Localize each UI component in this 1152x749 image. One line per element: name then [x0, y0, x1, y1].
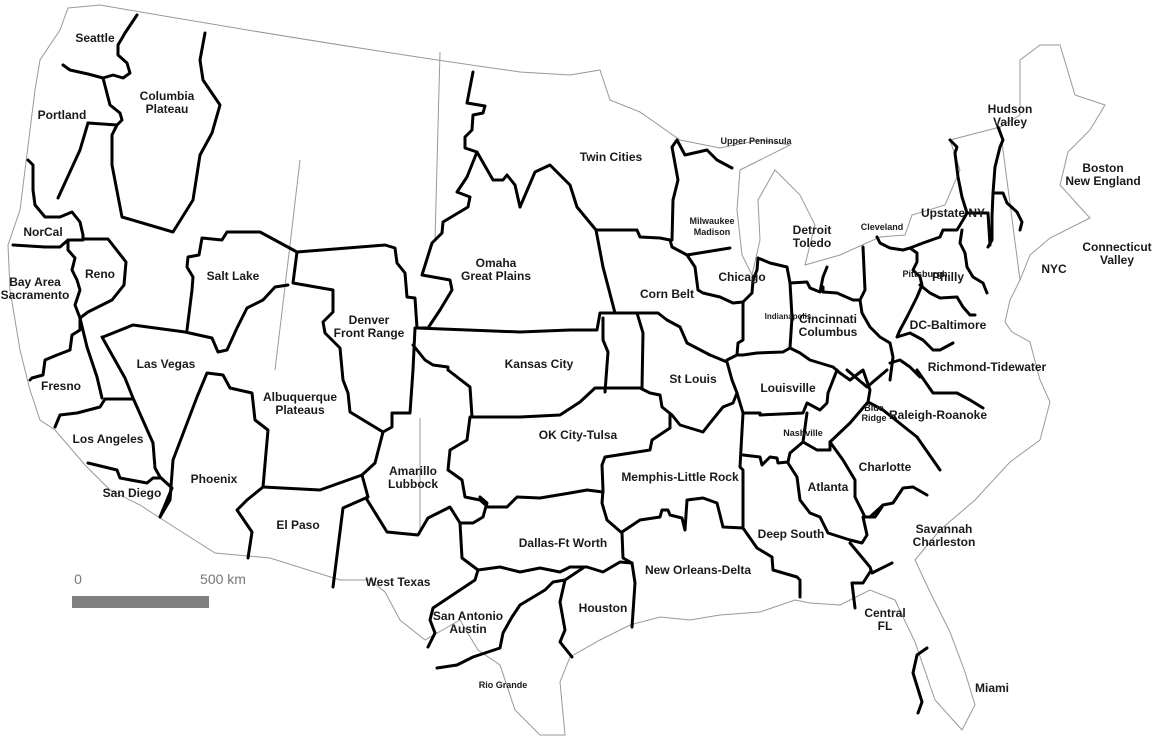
- labels: Plateau: [146, 102, 188, 116]
- labels: Los Angeles: [73, 432, 144, 446]
- labels: Hudson: [988, 102, 1032, 116]
- labels: Great Plains: [461, 269, 531, 283]
- labels: Valley: [1100, 253, 1134, 267]
- labels: Twin Cities: [580, 150, 643, 164]
- labels: Charleston: [913, 535, 975, 549]
- labels: New Orleans-Delta: [645, 563, 751, 577]
- labels: Cleveland: [861, 222, 903, 232]
- labels: West Texas: [366, 575, 431, 589]
- labels: Charlotte: [859, 460, 912, 474]
- labels: St Louis: [669, 372, 717, 386]
- labels: Savannah: [916, 522, 972, 536]
- labels: Kansas City: [505, 357, 574, 371]
- labels: Toledo: [793, 236, 831, 250]
- labels: Richmond-Tidewater: [928, 360, 1047, 374]
- labels: Denver: [349, 313, 390, 327]
- labels: Bay Area: [9, 275, 61, 289]
- labels: Dallas-Ft Worth: [519, 536, 607, 550]
- labels: DC-Baltimore: [910, 318, 987, 332]
- labels: Boston: [1082, 161, 1124, 175]
- labels: Reno: [85, 267, 115, 281]
- labels: NYC: [1041, 262, 1067, 276]
- labels: Indianapolis: [765, 312, 812, 321]
- labels: Pittsburgh: [902, 269, 948, 279]
- labels: Austin: [449, 622, 487, 636]
- labels: Upper Peninsula: [720, 136, 793, 146]
- labels: Columbus: [799, 325, 858, 339]
- labels: Columbia: [140, 89, 195, 103]
- labels: Central: [864, 606, 906, 620]
- labels: Chicago: [718, 270, 766, 284]
- labels: Philly: [932, 270, 964, 284]
- labels: Corn Belt: [640, 287, 694, 301]
- labels: Connecticut: [1082, 240, 1152, 254]
- labels: Rio Grande: [479, 680, 527, 690]
- labels: Upstate NY: [921, 206, 985, 220]
- labels: Front Range: [334, 326, 405, 340]
- labels: Deep South: [758, 527, 824, 541]
- labels: Ridge: [861, 413, 887, 423]
- labels: Seattle: [75, 31, 115, 45]
- labels: Madison: [694, 227, 730, 237]
- labels: Salt Lake: [207, 269, 260, 283]
- labels: Las Vegas: [137, 357, 196, 371]
- labels: Plateaus: [275, 403, 325, 417]
- labels: OK City-Tulsa: [539, 428, 618, 442]
- scale bar: 0: [74, 571, 82, 587]
- labels: El Paso: [276, 518, 320, 532]
- labels: Cincinnati: [799, 312, 857, 326]
- labels: Fresno: [41, 379, 81, 393]
- labels: Milwaukee: [689, 216, 735, 226]
- labels: Omaha: [476, 256, 517, 270]
- scale bar: 500 km: [200, 571, 246, 587]
- labels: San Antonio: [433, 609, 503, 623]
- labels: Atlanta: [808, 480, 849, 494]
- labels: Memphis-Little Rock: [621, 470, 739, 484]
- labels: New England: [1065, 174, 1141, 188]
- labels: Portland: [38, 108, 86, 122]
- labels: Miami: [975, 681, 1009, 695]
- labels: Valley: [993, 115, 1027, 129]
- scale bar: [72, 571, 246, 608]
- labels: Albuquerque: [263, 390, 337, 404]
- labels: NorCal: [23, 225, 63, 239]
- labels: Raleigh-Roanoke: [889, 408, 987, 422]
- labels: Amarillo: [389, 464, 437, 478]
- labels: Louisville: [760, 381, 816, 395]
- labels: Phoenix: [191, 472, 238, 486]
- labels: San Diego: [103, 486, 161, 500]
- labels: Houston: [579, 601, 627, 615]
- labels: Blue: [864, 403, 884, 413]
- labels: Detroit: [793, 223, 831, 237]
- labels: Sacramento: [1, 288, 69, 302]
- labels: Nashville: [783, 428, 823, 438]
- labels: FL: [878, 619, 892, 633]
- labels: Lubbock: [388, 477, 438, 491]
